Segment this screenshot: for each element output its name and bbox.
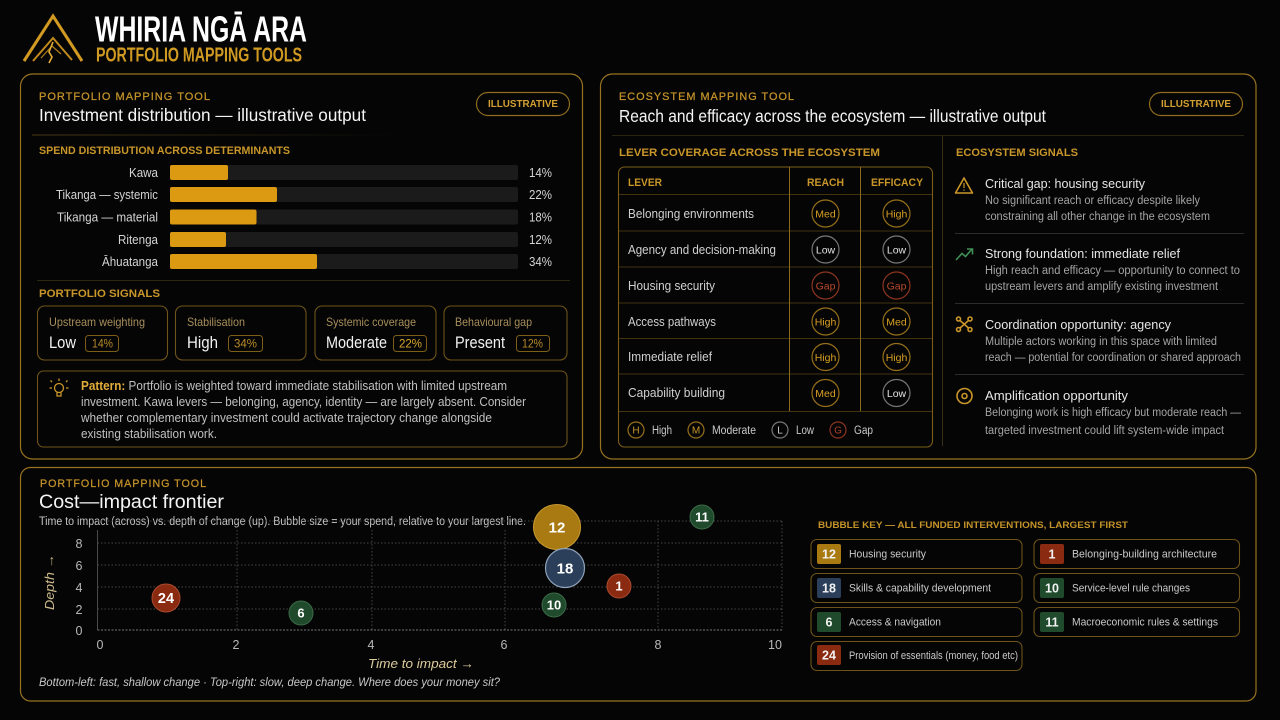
signal card: systemic coverage: Systemic coverage [326, 315, 416, 329]
x axis labels: 2 [233, 638, 240, 652]
chart description: Time to impact (across) vs. depth of change (up). Bubble size = your spend, relative to your largest line. [39, 516, 526, 528]
bar: Ahuatanga: 34% [529, 255, 552, 269]
row: access pathways: High [815, 316, 836, 328]
pattern text: existing stabilisation work. [81, 427, 217, 441]
row: agency and decision-making [628, 236, 910, 263]
key item 10: 10 [1045, 582, 1059, 596]
section heading: spend distribution: SPEND DISTRIBUTION ACROSS DETERMINANTS [39, 145, 290, 157]
signal: strong foundation: Strong foundation: immediate relief [985, 246, 1180, 261]
key item 6: 6 [826, 616, 833, 630]
bar: Tikanga material: Tikanga — material [57, 210, 158, 224]
signal card: upstream weighting: 14% [92, 338, 113, 350]
badge: illustrative [476, 92, 570, 116]
row: access pathways [628, 308, 910, 335]
row: capability building [628, 380, 910, 406]
signal: amplification opportunity: targeted investment could lift system-wide impact [985, 425, 1225, 437]
bubble 1: 1 [615, 578, 623, 594]
bubble chart [43, 504, 782, 671]
signal card: upstream weighting [38, 306, 168, 360]
signal card: behavioural gap: Present [455, 334, 505, 352]
icon: target [957, 388, 972, 404]
signal: amplification opportunity: Belonging work is high efficacy but moderate reach — [985, 407, 1241, 419]
bubble 18 [546, 548, 584, 588]
signal: critical gap [956, 176, 1210, 223]
row: immediate relief [628, 344, 910, 370]
badge: illustrative [1150, 92, 1242, 116]
key item 24: Provision of essentials (money, food etc) [849, 650, 1018, 662]
key item 24: 24 [822, 648, 836, 662]
legend: Low [796, 425, 815, 437]
subtitle: PORTFOLIO MAPPING TOOLS [96, 44, 302, 66]
y axis labels: 0 [76, 624, 83, 638]
callout: pattern [38, 371, 567, 447]
legend: G [834, 426, 842, 436]
signal card: behavioural gap: Behavioural gap [455, 315, 532, 329]
bubble 12 [534, 504, 580, 550]
bubble 18: 18 [557, 560, 573, 578]
pattern text: whether complementary investment could activate trajectory change alongside [80, 411, 492, 425]
signal: critical gap: constraining all other change in the ecosystem [985, 211, 1210, 223]
pattern text [80, 379, 526, 441]
table header [628, 177, 924, 189]
key item 11: 11 [1045, 616, 1059, 630]
row: capability building: Med [815, 388, 836, 400]
signal: critical gap: Critical gap: housing security [985, 176, 1145, 191]
key item 18 [811, 574, 1022, 602]
x axis labels: 8 [655, 638, 662, 652]
row: capability building: Low [887, 388, 907, 400]
bubble 24: 24 [158, 591, 174, 607]
pattern text: Pattern: Portfolio is weighted toward immediate stabilisation with limited upstream [81, 379, 507, 393]
signal card: upstream weighting: Upstream weighting [49, 315, 145, 329]
section heading: portfolio signals: PORTFOLIO SIGNALS [39, 288, 160, 300]
key heading: BUBBLE KEY — ALL FUNDED INTERVENTIONS, LARGEST FIRST [818, 520, 1128, 531]
legend [628, 422, 873, 438]
key item 18: 18 [822, 582, 836, 596]
legend: M [692, 426, 700, 436]
row: capability building: Capability building [628, 386, 725, 400]
key item 1 [1034, 540, 1240, 568]
panel: ecosystem mapping [600, 74, 1256, 459]
chart footnote: Bottom-left: fast, shallow change · Top-right: slow, deep change. Where does your money sit? [39, 677, 501, 689]
signal card: stabilisation: High [187, 334, 218, 352]
bubble 24 [152, 584, 180, 612]
row: access pathways: Access pathways [628, 315, 716, 329]
x axis labels: 4 [368, 638, 375, 652]
signal card: systemic coverage: Moderate [326, 334, 387, 352]
badge: illustrative: ILLUSTRATIVE [1161, 98, 1231, 110]
eyebrow: PORTFOLIO MAPPING TOOL [40, 478, 207, 490]
bar: Kawa: 14% [529, 166, 552, 180]
bar: Ritenga: 12% [529, 233, 552, 247]
key item 12 [811, 540, 1022, 568]
y axis title: Depth → [43, 554, 57, 610]
table header: EFFICACY [871, 177, 924, 189]
key item 24 [811, 642, 1022, 670]
signal card: stabilisation [176, 306, 306, 360]
bar: Ritenga: Ritenga [118, 233, 158, 247]
row: housing security: Housing security [628, 279, 716, 293]
signal card: systemic coverage [315, 306, 436, 360]
y axis labels [76, 537, 83, 638]
signal: amplification opportunity: Amplification opportunity [985, 388, 1128, 403]
y axis labels: 8 [76, 537, 83, 551]
bar: Ahuatanga [102, 254, 552, 269]
row: agency and decision-making: Low [816, 244, 836, 256]
bubble 11 [690, 505, 714, 529]
x axis labels: 6 [501, 638, 508, 652]
badge: illustrative: ILLUSTRATIVE [488, 98, 558, 110]
signal card: stabilisation: 34% [234, 338, 257, 350]
x axis labels [97, 638, 782, 652]
eyebrow: PORTFOLIO MAPPING TOOL [39, 91, 211, 103]
row: immediate relief: High [886, 352, 907, 364]
key item 1: Belonging-building architecture [1072, 548, 1217, 560]
bubble key [811, 520, 1240, 670]
signal: coordination opportunity: reach — potential for coordination or shared approach [985, 352, 1241, 364]
row: belonging environments: Belonging environments [628, 207, 754, 221]
icon: mountain logo [24, 16, 82, 63]
y axis labels: 6 [76, 559, 83, 573]
signal: coordination opportunity: Coordination opportunity: agency [985, 317, 1171, 332]
key item 1: 1 [1049, 548, 1056, 562]
bubble 10: 10 [547, 598, 561, 612]
key item 6: Access & navigation [849, 616, 941, 628]
bar: Tikanga systemic: 22% [529, 188, 552, 202]
heading: Investment distribution — illustrative output [39, 105, 366, 125]
row: immediate relief: High [815, 352, 836, 364]
signal card: stabilisation: Stabilisation [187, 315, 245, 329]
bar: Tikanga systemic [56, 187, 552, 202]
bar: Ritenga [118, 232, 552, 247]
bubble 12: 12 [549, 520, 565, 536]
bar: Ahuatanga: Āhuatanga [102, 255, 158, 269]
x axis title: Time to impact → [368, 656, 474, 671]
eyebrow: ECOSYSTEM MAPPING TOOL [619, 91, 795, 103]
title: WHIRIA NGĀ ARA [95, 8, 307, 50]
y axis labels: 4 [76, 581, 83, 595]
icon: warning triangle [956, 178, 972, 193]
x axis labels: 10 [768, 638, 782, 652]
row: agency and decision-making: Agency and decision-making [628, 243, 776, 257]
signal card: upstream weighting: Low [49, 334, 76, 352]
panel: cost-impact frontier [20, 468, 1256, 701]
row: belonging environments: Med [815, 208, 836, 220]
signal card: behavioural gap: 12% [522, 338, 543, 350]
signal: strong foundation [956, 246, 1240, 293]
bar: Kawa: Kawa [129, 166, 158, 180]
row: immediate relief: Immediate relief [628, 350, 712, 364]
row: access pathways: Med [886, 316, 907, 328]
row: housing security: Gap [887, 280, 907, 292]
signal: amplification opportunity [957, 388, 1241, 437]
signal: coordination opportunity: Multiple actors working in this space with limited [985, 336, 1217, 348]
bubble 6 [289, 601, 313, 625]
row: belonging environments: High [886, 208, 907, 220]
key item 10 [1034, 574, 1240, 602]
row: belonging environments [628, 200, 910, 227]
key item 12: 12 [822, 548, 836, 562]
key item 11 [1034, 608, 1240, 636]
signal: strong foundation: High reach and efficacy — opportunity to connect to [985, 265, 1240, 277]
bubble 6: 6 [297, 606, 305, 620]
signal: critical gap: No significant reach or efficacy despite likely [985, 195, 1200, 207]
signal: coordination opportunity [956, 317, 1241, 364]
signal card: systemic coverage: 22% [399, 338, 422, 350]
icon: light bulb [50, 378, 68, 396]
table header: REACH [807, 177, 844, 189]
y axis labels: 2 [76, 603, 83, 617]
bar: Tikanga systemic: Tikanga — systemic [56, 188, 158, 202]
row: agency and decision-making: Low [887, 244, 907, 256]
bubble 11: 11 [695, 510, 709, 524]
signal card: behavioural gap [444, 306, 567, 360]
section heading: ecosystem signals: ECOSYSTEM SIGNALS [956, 147, 1078, 159]
table: lever coverage [618, 167, 932, 447]
key item 11: Macroeconomic rules & settings [1072, 616, 1218, 628]
bar: Tikanga material [57, 210, 552, 224]
panel: investment distribution [20, 74, 582, 459]
bar: Tikanga material: 18% [529, 210, 552, 224]
legend: L [777, 426, 783, 436]
legend: Moderate [712, 425, 756, 437]
legend: High [652, 425, 672, 437]
key item 10: Service-level rule changes [1072, 582, 1190, 594]
signal: strong foundation: upstream levers and amplify existing investment [985, 281, 1219, 293]
bar chart: spend distribution [56, 165, 552, 269]
key item 18: Skills & capability development [849, 582, 991, 594]
key item 12: Housing security [849, 548, 926, 560]
section heading: lever coverage: LEVER COVERAGE ACROSS THE ECOSYSTEM [619, 147, 880, 159]
header [24, 8, 307, 66]
row: housing security: Gap [816, 280, 836, 292]
legend: H [632, 426, 640, 436]
bubble 10 [542, 593, 566, 617]
x axis labels: 0 [97, 638, 104, 652]
icon: connected nodes [956, 317, 972, 332]
pattern text: investment. Kawa levers — belonging, agency, identity — are largely absent. Consider [81, 395, 526, 409]
icon: rising arrow [956, 249, 972, 260]
heading: Reach and efficacy across the ecosystem — illustrative output [619, 106, 1046, 126]
bubble 1 [607, 574, 631, 598]
table header: LEVER [628, 177, 662, 189]
heading: Cost—impact frontier [39, 492, 225, 513]
bar: Kawa [129, 165, 552, 180]
key item 6 [811, 608, 1022, 636]
legend: Gap [854, 425, 873, 437]
row: housing security [628, 272, 910, 299]
